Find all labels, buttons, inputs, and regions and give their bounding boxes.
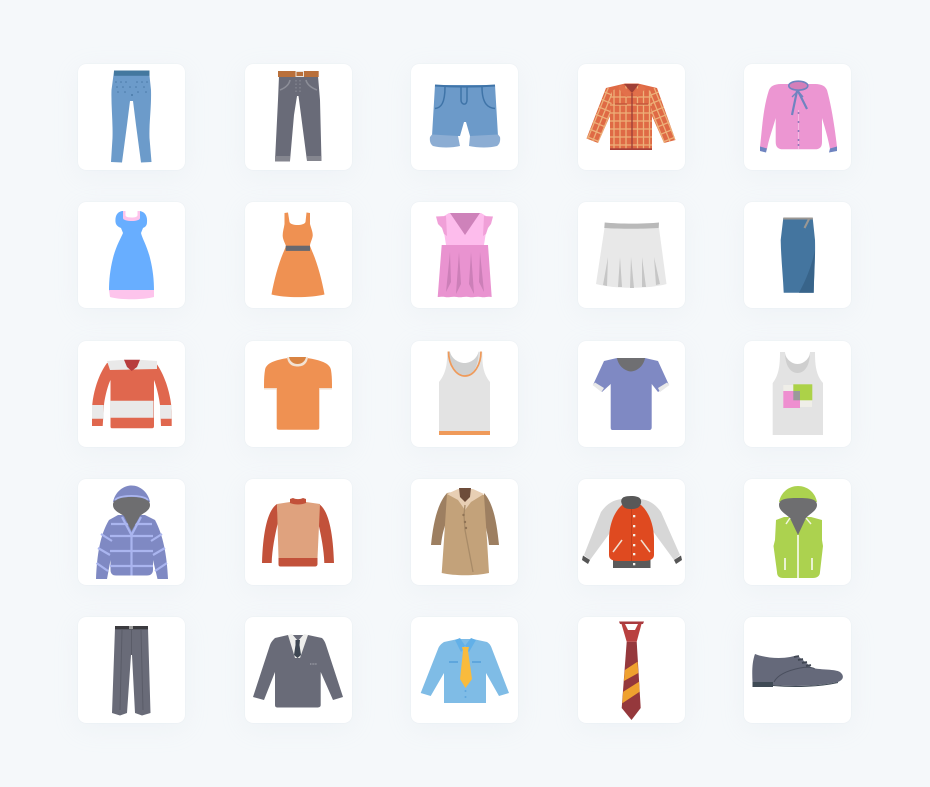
icon: purple v-neck tee [592, 358, 670, 430]
icon: grey oxford shoe [752, 654, 843, 687]
card: skinny jeans [78, 64, 185, 170]
card: grey dress trousers [78, 617, 185, 723]
icon: grey dress trousers [112, 626, 150, 716]
icon: striped necktie [619, 622, 644, 720]
card: pink blouse [744, 64, 851, 170]
card: purple puffer jacket [78, 479, 185, 585]
icon: pink blouse [760, 80, 837, 152]
card: varsity jacket [578, 479, 685, 585]
card: striped sweater [78, 341, 185, 447]
icon: beige trench coat [431, 488, 499, 576]
card: grey oxford shoe [744, 617, 851, 723]
icon: tan sweater [262, 498, 334, 566]
card: tan sweater [245, 479, 352, 585]
icon: blue long dress [109, 211, 154, 300]
card: green hooded vest [744, 479, 851, 585]
icon: plaid shirt [586, 84, 676, 150]
icon: orange dress with belt [272, 212, 324, 298]
icon: green hooded vest [774, 486, 823, 578]
icon: white tank top [439, 352, 490, 435]
icon: light blue shirt with tie [420, 638, 509, 703]
card: grey suit [245, 617, 352, 723]
icon: skinny jeans [111, 70, 152, 162]
icon: varsity jacket [582, 496, 682, 568]
card: plaid shirt [578, 64, 685, 170]
card: blue long dress [78, 202, 185, 308]
icon: pleated white skirt [596, 222, 666, 288]
icon: pink babydoll top [436, 213, 493, 298]
icon: striped sweater [92, 360, 172, 428]
card: striped necktie [578, 617, 685, 723]
card: white tank top [411, 341, 518, 447]
icon: purple puffer jacket [96, 486, 168, 579]
card: grey trousers with belt [245, 64, 352, 170]
card: purple v-neck tee [578, 341, 685, 447]
card: graphic tank top [744, 341, 851, 447]
card: blue pencil skirt [744, 202, 851, 308]
icon: graphic tank top [772, 352, 823, 435]
card: beige trench coat [411, 479, 518, 585]
card: pleated white skirt [578, 202, 685, 308]
card: orange t-shirt [245, 341, 352, 447]
card: denim shorts [411, 64, 518, 170]
icon: grey trousers with belt [275, 71, 322, 162]
card: pink babydoll top [411, 202, 518, 308]
icon: denim shorts [430, 84, 500, 148]
card: light blue shirt with tie [411, 617, 518, 723]
icon: grey suit [253, 634, 343, 708]
card: orange dress with belt [245, 202, 352, 308]
icon: orange t-shirt [264, 357, 332, 430]
icon: blue pencil skirt [780, 218, 816, 293]
